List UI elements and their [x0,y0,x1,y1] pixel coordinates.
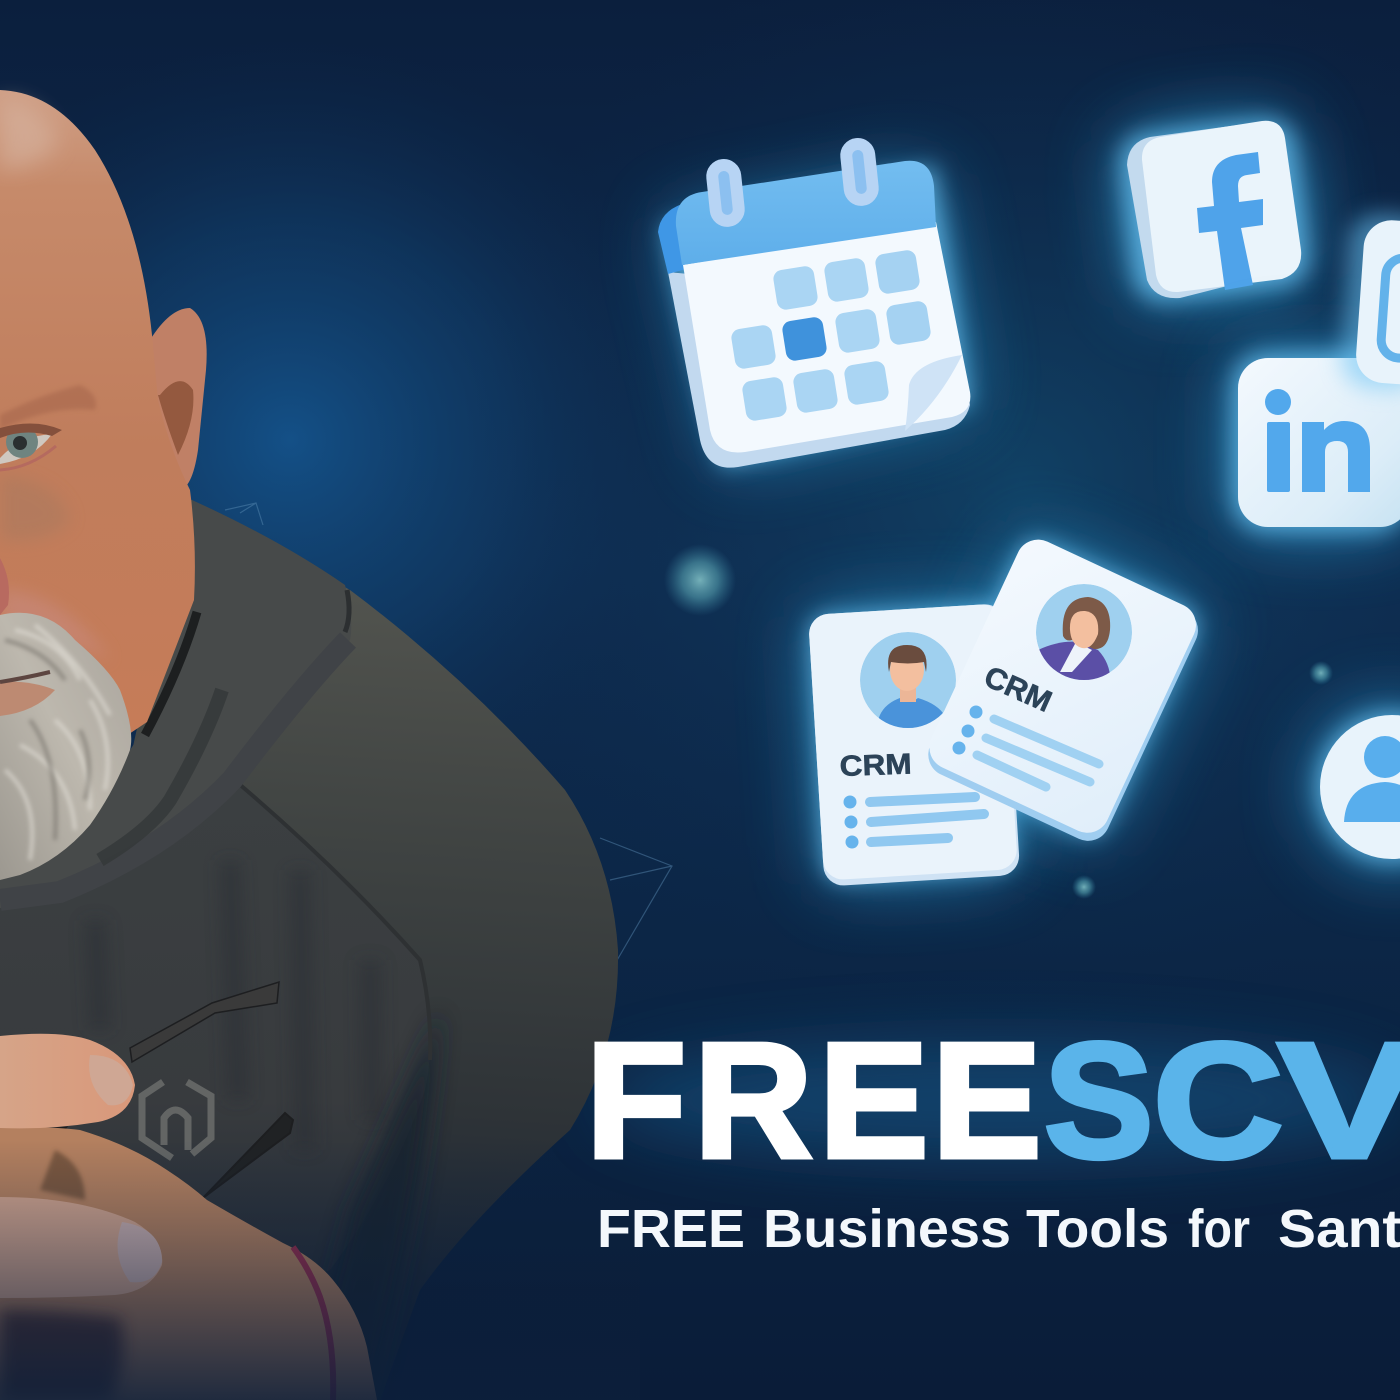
icon: instagram [1339,211,1400,392]
icon: facebook [1116,115,1313,305]
title blue word [1044,1009,1400,1192]
subtitle: Business [763,1199,1011,1259]
nose [0,558,9,615]
crm front list [952,706,1099,787]
subtitle: FREE [597,1199,745,1259]
man portrait [0,90,640,1400]
glowing particle: large [664,544,736,616]
eye [0,423,62,470]
network lines decoration [225,503,672,962]
head [0,90,195,740]
icon: linkedin [1232,352,1400,532]
shirt logo [142,1082,211,1158]
avatar: woman [1036,584,1132,685]
glasses [23,982,293,1198]
crm card: back [808,603,1020,887]
crm label front: CRM [979,660,1057,719]
calendar day grid [730,249,932,422]
mouth [0,672,55,716]
ear [150,308,207,490]
beard [0,613,131,880]
crm card: front [921,532,1205,848]
calendar rings [711,143,874,222]
avatar: man [860,632,956,732]
title blue word: C [1153,1009,1283,1192]
facebook letter f [1197,152,1263,290]
hood collar [0,500,351,908]
title white word: FREE [586,1009,1041,1192]
hands [0,1034,377,1400]
subtitle [597,1199,1400,1259]
calendar page curl [905,355,962,431]
crm back list [844,796,984,848]
icon: calendar [658,143,972,468]
shirt [0,498,618,1400]
person glyph [1344,736,1400,822]
linkedin letters in [1265,389,1370,492]
icon: person badge [1312,707,1400,867]
bottom fade [0,1140,640,1400]
brow [0,385,96,430]
crm cards [808,532,1205,887]
glowing particle: small bottom [1072,875,1096,899]
subtitle: for [1188,1199,1250,1259]
crm label back: CRM [839,749,912,783]
title: FREESCV [586,1009,1400,1192]
subtitle: Tools [1026,1199,1169,1259]
glowing particle: small right [1309,661,1333,685]
chest [0,783,430,1400]
title blue word: S [1044,1009,1153,1192]
